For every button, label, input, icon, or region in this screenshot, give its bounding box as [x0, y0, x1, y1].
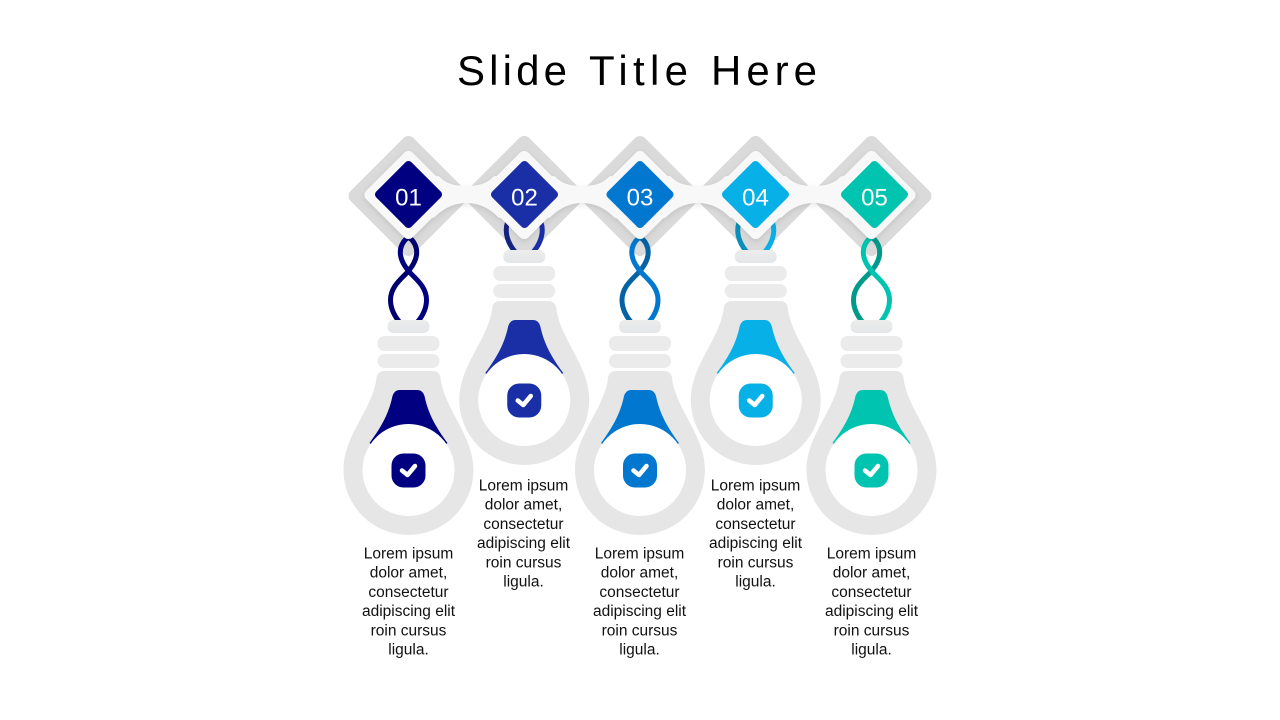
- number badge 05: [845, 165, 904, 224]
- text block 03: roin cursus: [602, 622, 678, 639]
- text block 03: adipiscing elit: [593, 603, 687, 620]
- text block 05: Lorem ipsum: [827, 546, 916, 562]
- light bulb 03: [575, 320, 705, 535]
- text block 04: adipiscing elit: [709, 535, 803, 552]
- light bulb 04: [691, 250, 821, 465]
- number badge 03: 03: [627, 184, 653, 212]
- text block 03: Lorem ipsum: [595, 546, 684, 562]
- text block 02: roin cursus: [486, 554, 562, 571]
- text block 05: ligula.: [851, 642, 892, 658]
- number badge 02: 02: [511, 184, 538, 212]
- text block 01: ligula.: [388, 642, 429, 658]
- text block 04: Lorem ipsum: [711, 478, 800, 494]
- light bulb 02: [459, 250, 589, 465]
- number badge 01: [379, 165, 438, 224]
- text block 05: [825, 546, 919, 658]
- text block 02: consectetur: [483, 516, 564, 533]
- light bulb 05: [806, 320, 936, 535]
- number badge 04: 04: [742, 184, 769, 212]
- text block 04: consectetur: [715, 516, 796, 533]
- title: Slide: [457, 47, 567, 94]
- text block 02: ligula.: [503, 574, 544, 590]
- title: Title: [589, 47, 688, 94]
- white connector band: [370, 157, 910, 233]
- number badge 05: 05: [861, 184, 888, 212]
- text block 02: [477, 478, 571, 590]
- twisted cord 03: [622, 236, 658, 322]
- text block 01: roin cursus: [371, 622, 447, 639]
- text block 05: consectetur: [831, 584, 912, 601]
- twisted cord 02: [506, 201, 542, 252]
- text block 04: ligula.: [735, 574, 776, 590]
- text block 05: roin cursus: [834, 622, 910, 639]
- text block 03: [593, 546, 687, 658]
- text block 01: consectetur: [368, 584, 449, 601]
- text block 03: ligula.: [619, 642, 660, 658]
- text block 05: adipiscing elit: [825, 603, 919, 620]
- text block 01: Lorem ipsum: [364, 546, 453, 562]
- text block 02: adipiscing elit: [477, 535, 571, 552]
- text block 05: dolor amet,: [833, 565, 910, 582]
- text block 03: consectetur: [599, 584, 680, 601]
- text block 01: [362, 546, 456, 658]
- title: [457, 47, 817, 94]
- text block 02: Lorem ipsum: [479, 478, 568, 494]
- text block 03: dolor amet,: [601, 565, 678, 582]
- text block 04: dolor amet,: [717, 497, 794, 514]
- text block 02: dolor amet,: [485, 497, 562, 514]
- gray diamond backplates: [356, 143, 924, 249]
- text block 01: adipiscing elit: [362, 603, 456, 620]
- light bulb 01: [344, 320, 474, 535]
- number badge 02: [495, 165, 554, 224]
- number badge 03: [610, 165, 670, 224]
- text block 01: dolor amet,: [370, 565, 447, 582]
- text block 04: [709, 478, 803, 590]
- twisted cord 01: [390, 236, 426, 322]
- twisted cord 05: [854, 236, 890, 322]
- number badge 01: 01: [395, 184, 422, 212]
- number badge 04: [726, 165, 785, 224]
- twisted cord 04: [738, 201, 774, 252]
- text block 04: roin cursus: [718, 554, 794, 571]
- title: Here: [711, 47, 817, 94]
